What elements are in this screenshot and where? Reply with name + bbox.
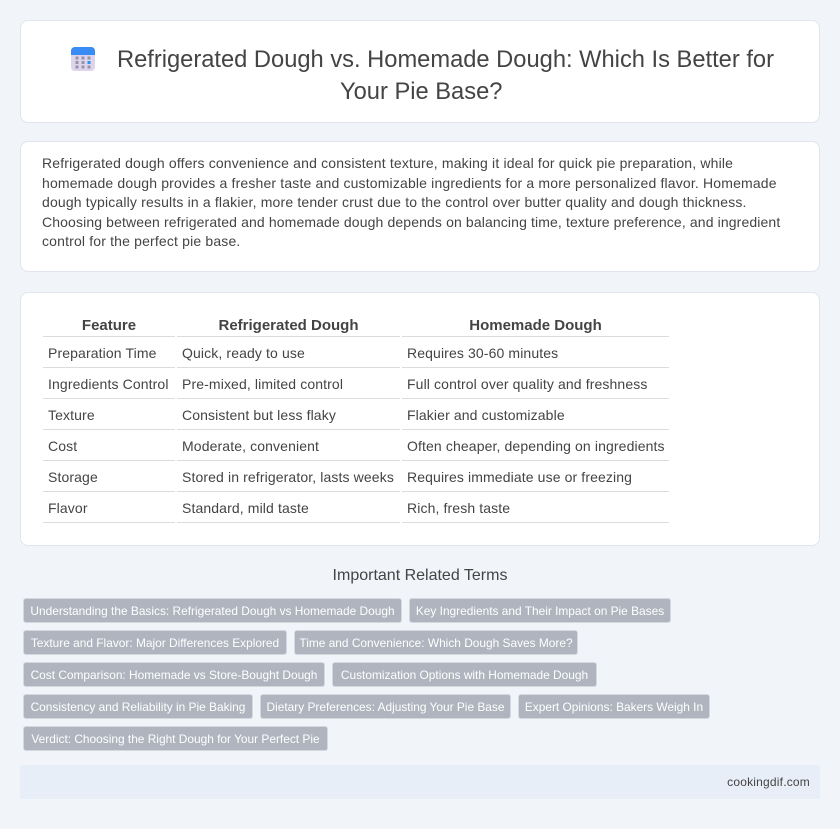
icon: calendar [71, 47, 95, 71]
tag [260, 694, 511, 719]
row: ingredients control: Ingredients Control [48, 376, 169, 392]
table header [82, 317, 602, 334]
table header: Refrigerated Dough [218, 317, 358, 334]
text block: introduction: control for the perfect pie base. [42, 233, 240, 249]
tag: Expert Opinions: Bakers Weigh In [525, 700, 703, 714]
row: flavor: Rich, fresh taste [407, 500, 510, 516]
footer [20, 765, 820, 799]
tag: Cost Comparison: Homemade vs Store-Bought Dough [31, 668, 317, 682]
text block: introduction: Choosing between refrigerated and homemade dough depends on balancing time, texture preference, and ingredient [42, 214, 780, 230]
tag [23, 598, 402, 623]
tag [518, 694, 710, 719]
row: ingredients control [48, 376, 647, 392]
row: storage: Requires immediate use or freezing [407, 469, 632, 485]
heading: related terms: Important Related Terms [333, 567, 507, 584]
row: texture: Consistent but less flaky [182, 407, 336, 423]
text block: introduction: Refrigerated dough offers convenience and consistent texture, making it ideal for quick pie preparation, while [42, 155, 733, 171]
footer source: cookingdif.com [727, 775, 810, 789]
row: texture [48, 407, 565, 423]
text block: introduction [42, 155, 780, 249]
text block: introduction: dough typically results in a flakier, more tender crust due to the control over butter quality and dough thickness. [42, 194, 747, 210]
row: cost: Often cheaper, depending on ingredients [407, 438, 665, 454]
row: preparation time: Preparation Time [48, 345, 157, 361]
comparison table [43, 317, 669, 523]
row: storage: Storage [48, 469, 98, 485]
row: storage [48, 469, 632, 485]
row: ingredients control: Full control over quality and freshness [407, 376, 647, 392]
panel: title header [20, 20, 820, 123]
tag [23, 694, 253, 719]
panel: introduction [20, 141, 820, 272]
tag: Consistency and Reliability in Pie Baking [31, 700, 245, 714]
title [117, 47, 774, 105]
tag [23, 726, 328, 751]
tag: Time and Convenience: Which Dough Saves More? [299, 636, 573, 650]
tag [23, 630, 287, 655]
row: texture: Flakier and customizable [407, 407, 565, 423]
row: preparation time: Quick, ready to use [182, 345, 305, 361]
row: texture: Texture [48, 407, 95, 423]
tag: Verdict: Choosing the Right Dough for Your Perfect Pie [31, 732, 320, 746]
tag [332, 662, 597, 687]
row: cost: Cost [48, 438, 77, 454]
row: preparation time: Requires 30-60 minutes [407, 345, 558, 361]
row: flavor [48, 500, 510, 516]
tag: Dietary Preferences: Adjusting Your Pie Base [267, 700, 504, 714]
row: cost: Moderate, convenient [182, 438, 319, 454]
text block: introduction: homemade dough provides a fresher taste and customizable ingredients for a more personalized flavor. Homemade [42, 174, 777, 190]
title: Refrigerated Dough vs. Homemade Dough: Which Is Better for [117, 47, 774, 73]
tag [409, 598, 671, 623]
table header: Homemade Dough [469, 317, 602, 334]
tag [294, 630, 578, 655]
row: flavor: Flavor [48, 500, 88, 516]
tag list: related terms [23, 598, 710, 751]
row: flavor: Standard, mild taste [182, 500, 309, 516]
panel: comparison table [20, 292, 820, 546]
row: preparation time [48, 345, 558, 361]
tag: Customization Options with Homemade Dough [341, 668, 588, 682]
tag: Key Ingredients and Their Impact on Pie Bases [416, 604, 664, 618]
row: cost [48, 438, 665, 454]
row: storage: Stored in refrigerator, lasts weeks [182, 469, 394, 485]
table header: Feature [82, 317, 136, 334]
tag: Texture and Flavor: Major Differences Explored [31, 636, 279, 650]
tag: Understanding the Basics: Refrigerated Dough vs Homemade Dough [30, 604, 395, 618]
row: ingredients control: Pre-mixed, limited control [182, 376, 343, 392]
title: Your Pie Base? [340, 79, 502, 105]
tag [23, 662, 325, 687]
